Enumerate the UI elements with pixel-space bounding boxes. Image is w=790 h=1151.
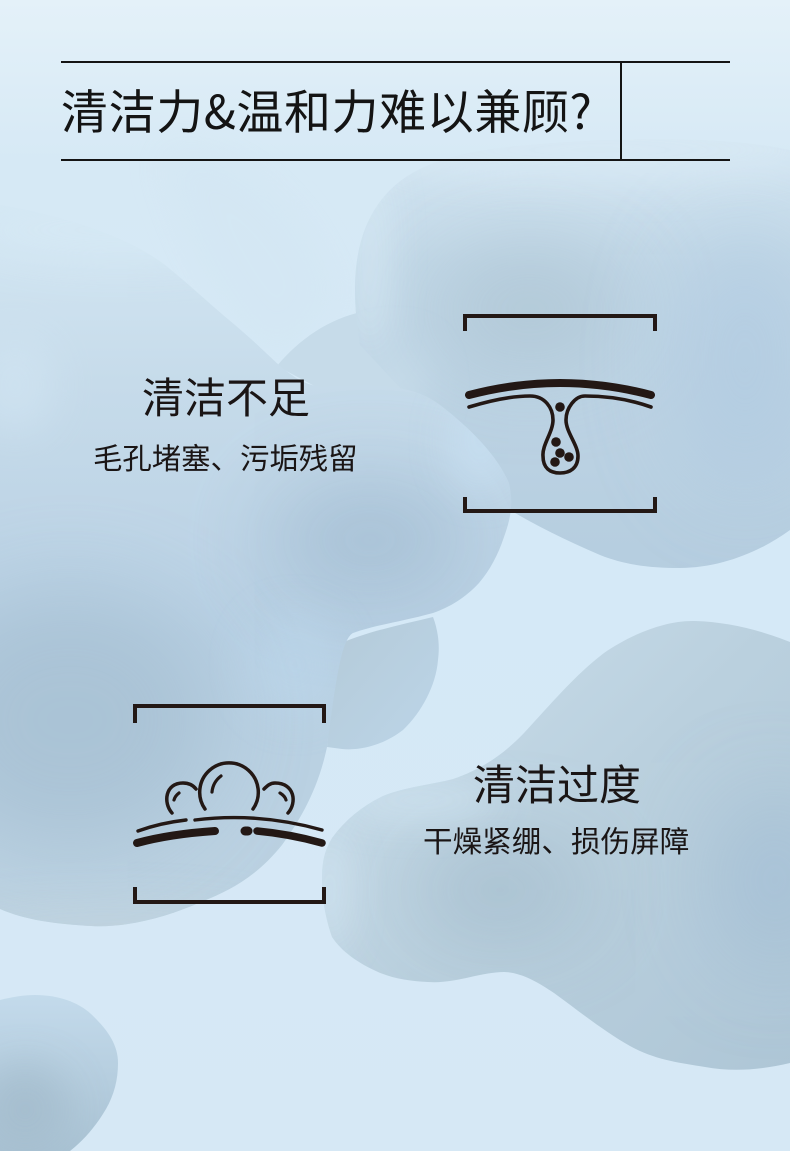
lower left blob — [0, 990, 125, 1151]
large left blob — [0, 280, 510, 926]
title frame with rules — [61, 61, 730, 161]
icon: clogged pore — [463, 314, 657, 513]
small lobe — [327, 617, 439, 749]
middle lobe under wedge — [277, 312, 440, 405]
lower right blob — [316, 615, 790, 1075]
upper right blob — [355, 179, 790, 568]
title: 清洁力&温和力难以兼顾? — [61, 74, 592, 143]
description: over cleansing: 干燥紧绷、损伤屏障 — [423, 818, 689, 861]
icon: stripped skin barrier with bubbles — [133, 704, 326, 904]
heading: over cleansing: 清洁过度 — [473, 752, 641, 813]
description: insufficient cleansing: 毛孔堵塞、污垢残留 — [93, 436, 358, 478]
heading: insufficient cleansing: 清洁不足 — [142, 365, 310, 426]
faint upper blob behind left blob — [160, 149, 337, 363]
